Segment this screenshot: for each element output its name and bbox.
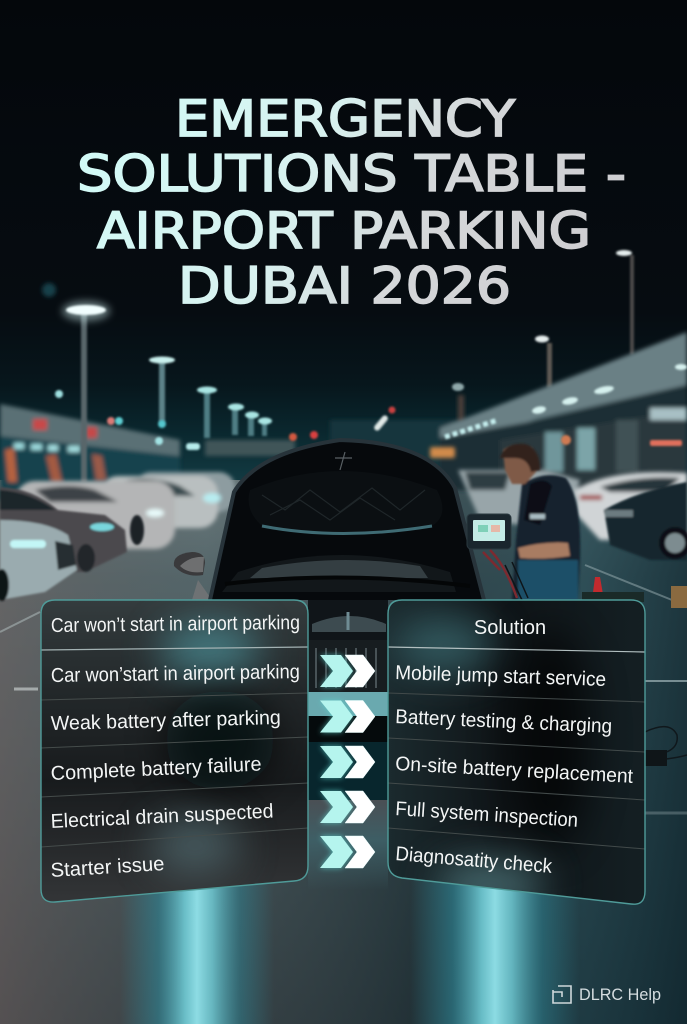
watermark: DLRC Help: DLRC Help — [579, 985, 661, 1004]
parking lot ground — [0, 480, 687, 1024]
arrow row 3 — [320, 746, 375, 778]
light reflections on the ground — [120, 870, 580, 1024]
title: AIRPORT PARKING — [97, 202, 591, 260]
arrow row 4 — [320, 791, 375, 823]
night sky background — [0, 0, 687, 480]
panel: solutions — [388, 600, 645, 911]
solution row 1: Mobile jump start service — [395, 662, 606, 691]
problem row 2: Weak battery after parking — [51, 707, 281, 735]
street lamps left — [42, 283, 396, 482]
solution row 3: On-site battery replacement — [395, 753, 634, 788]
left terminal building, blurred — [0, 404, 295, 500]
icon: diagnostic tablet — [467, 514, 511, 549]
panel: problems — [41, 600, 308, 902]
arrow row 2 — [320, 700, 375, 732]
centre grille and colour strip behind arrows — [308, 640, 388, 890]
title: DUBAI 2026 — [178, 257, 511, 315]
problem header: Car won’t start in airport parking — [51, 612, 300, 637]
parked cars right row — [458, 470, 687, 560]
right canopy and lamps — [330, 250, 687, 490]
solution row 2: Battery testing & charging — [395, 706, 613, 738]
parked cars left row — [0, 472, 235, 601]
title: EMERGENCY — [175, 90, 515, 148]
solution header: Solution — [474, 617, 546, 639]
problem row 3: Complete battery failure — [50, 753, 262, 785]
solution row 4: Full system inspection — [395, 798, 579, 832]
solution row 5: Diagnosatity check — [395, 843, 554, 878]
problem row 5: Starter issue — [50, 853, 165, 882]
title — [77, 90, 626, 315]
arrows between problems and solutions — [320, 655, 375, 868]
title: SOLUTIONS TABLE - — [77, 145, 626, 203]
problem row 4: Electrical drain suspected — [50, 801, 274, 833]
problem row 1: Car won’start in airport parking — [51, 661, 300, 687]
arrow row 5 — [320, 836, 375, 868]
open car hood and engine bay — [174, 440, 484, 645]
jumper cables on the ground — [645, 727, 687, 766]
mechanic with tablet — [467, 444, 687, 608]
arrow row 1 — [320, 655, 375, 687]
